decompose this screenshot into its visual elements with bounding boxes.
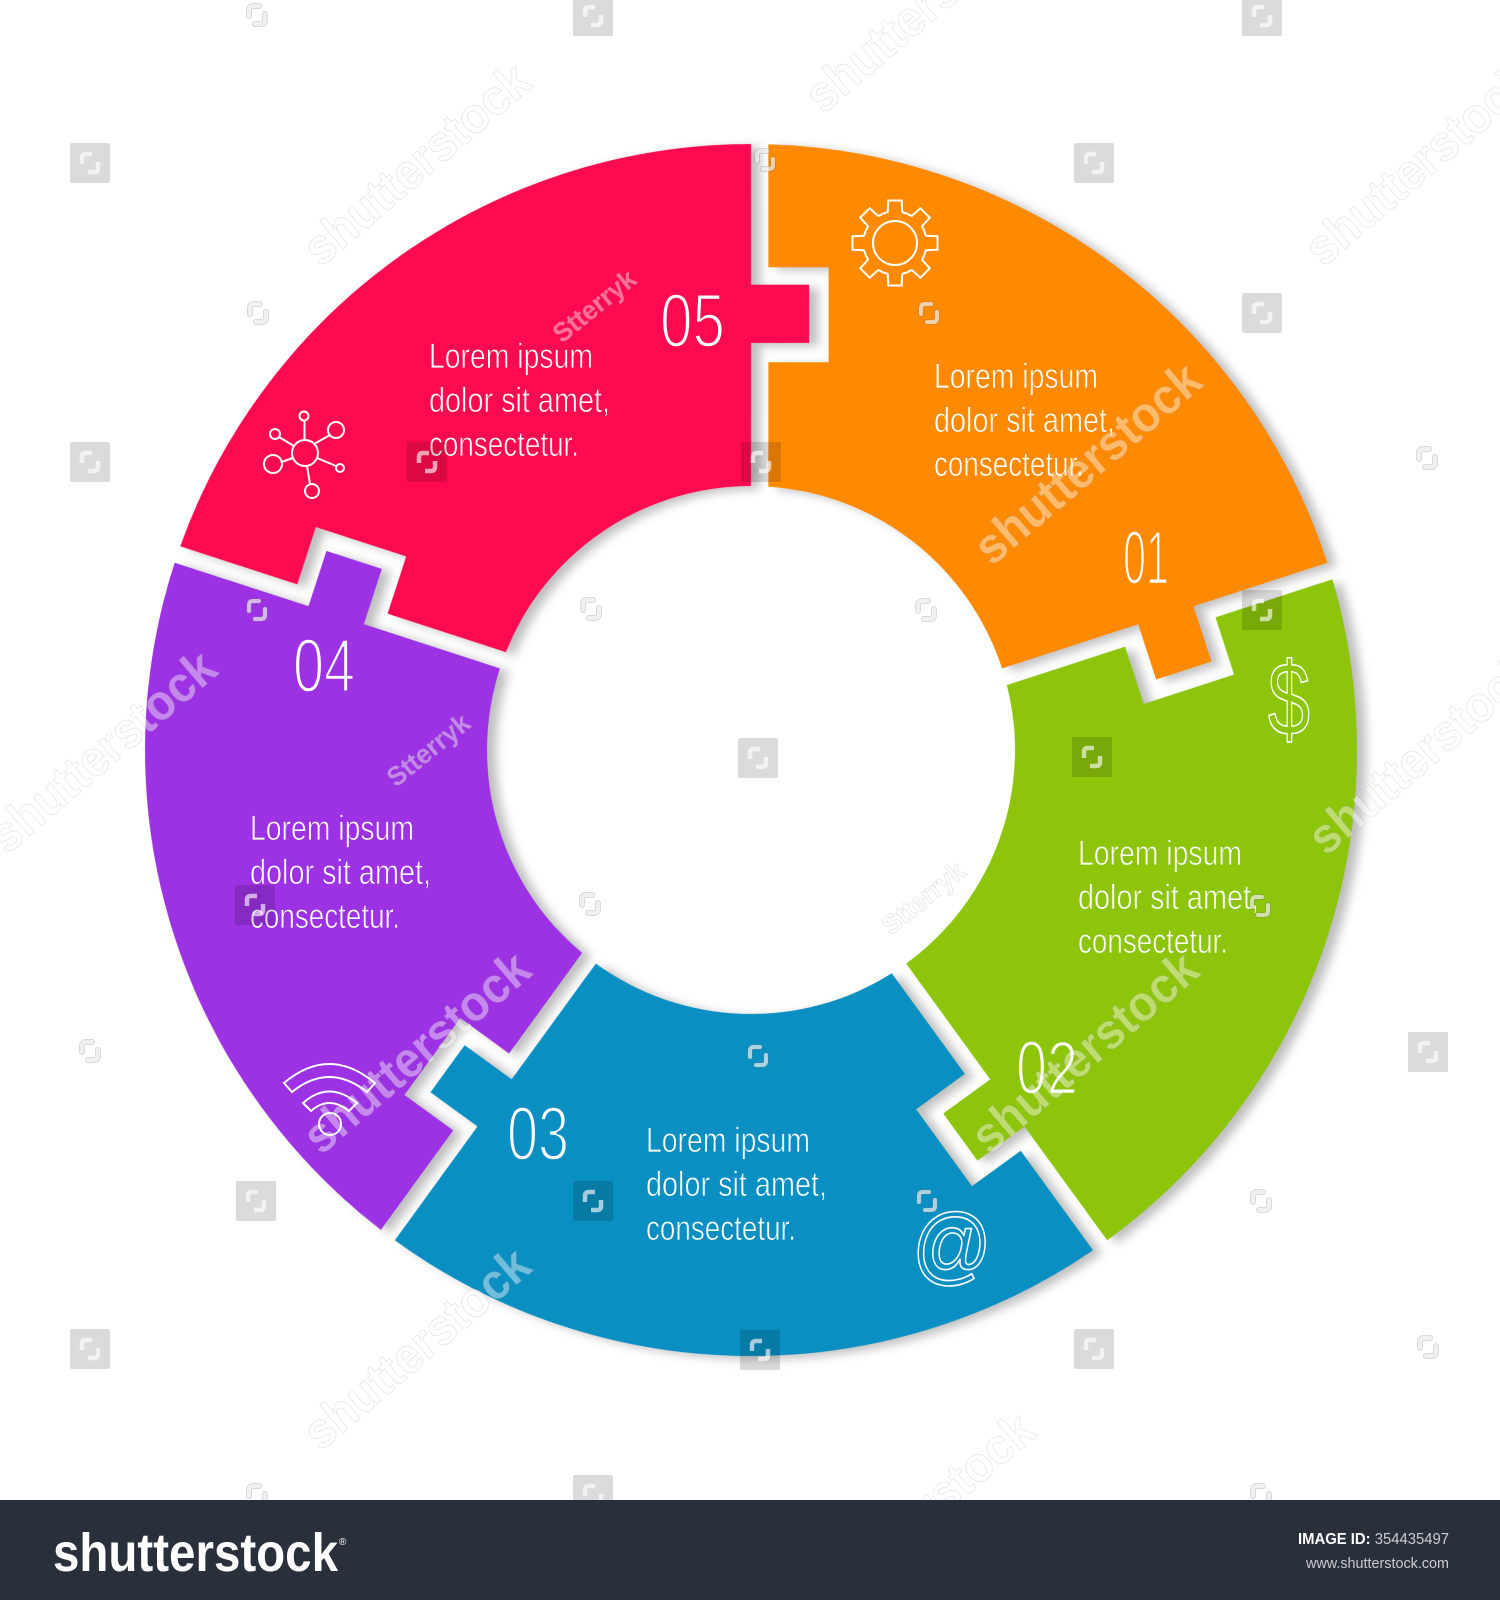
footer website: www.shutterstock.com	[1305, 1555, 1449, 1572]
text block: green	[1078, 834, 1259, 961]
text block: orange: Lorem ipsum	[934, 357, 1098, 396]
text block: orange	[934, 357, 1115, 484]
segment 01: orange	[768, 144, 1327, 680]
watermark: shutterstock wordmarks: shutterstock	[963, 351, 1212, 575]
segment 05: red	[180, 15, 862, 712]
text block: purple: Lorem ipsum	[250, 809, 414, 848]
text block: blue	[646, 1121, 827, 1248]
number 05: 05	[660, 279, 725, 364]
text block: green: Lorem ipsum	[1078, 834, 1242, 873]
watermark: contributor names: Stterryk	[381, 707, 477, 793]
segment 04: purple	[0, 468, 696, 1230]
text block: red: Lorem ipsum	[429, 337, 593, 376]
text block: blue: Lorem ipsum	[646, 1121, 810, 1160]
watermark: contributor names: Stterryk	[547, 263, 643, 349]
number 01: 01	[1123, 516, 1169, 601]
text block: blue: dolor sit amet,	[646, 1165, 827, 1204]
text block: green: consectetur.	[1078, 922, 1228, 961]
icon: dollar sign: $	[1268, 642, 1310, 758]
watermark: shutterstock wordmarks: shutterstock	[960, 940, 1209, 1164]
watermark: contributor names: Stterryk	[876, 855, 972, 941]
segment 02: green	[823, 579, 1500, 1276]
icon: gear	[852, 200, 938, 286]
text block: blue: consectetur.	[646, 1209, 796, 1248]
watermark: shutterstock wordmarks: shutterstock	[292, 52, 541, 276]
icon: network	[264, 412, 344, 498]
footer logo: shutterstock	[53, 1523, 339, 1583]
number 04: 04	[293, 624, 355, 709]
watermark: contributor names	[381, 263, 972, 941]
segment 03: blue	[326, 817, 1093, 1579]
watermark: shutterstock wordmarks: shutterstock	[292, 940, 541, 1164]
text block: red	[429, 337, 610, 464]
text block: purple: consectetur.	[250, 897, 400, 936]
footer bar	[0, 1500, 1500, 1600]
number 02: 02	[1016, 1026, 1078, 1111]
text block: purple	[250, 809, 431, 936]
text block: red: consectetur.	[429, 425, 579, 464]
number 03: 03	[507, 1092, 569, 1177]
icon: wifi	[284, 1064, 375, 1135]
text block: red: dolor sit amet,	[429, 381, 610, 420]
footer image id: IMAGE ID: 354435497	[1298, 1531, 1449, 1548]
icon: at sign: @	[912, 1197, 992, 1293]
footer registered mark: ®	[339, 1537, 347, 1548]
text block: orange: dolor sit amet,	[934, 401, 1115, 440]
text block: purple: dolor sit amet,	[250, 853, 431, 892]
text block: orange: consectetur.	[934, 445, 1084, 484]
text block: green: dolor sit amet,	[1078, 878, 1259, 917]
watermark: shutterstock wordmarks: shutterstock	[292, 1236, 541, 1460]
